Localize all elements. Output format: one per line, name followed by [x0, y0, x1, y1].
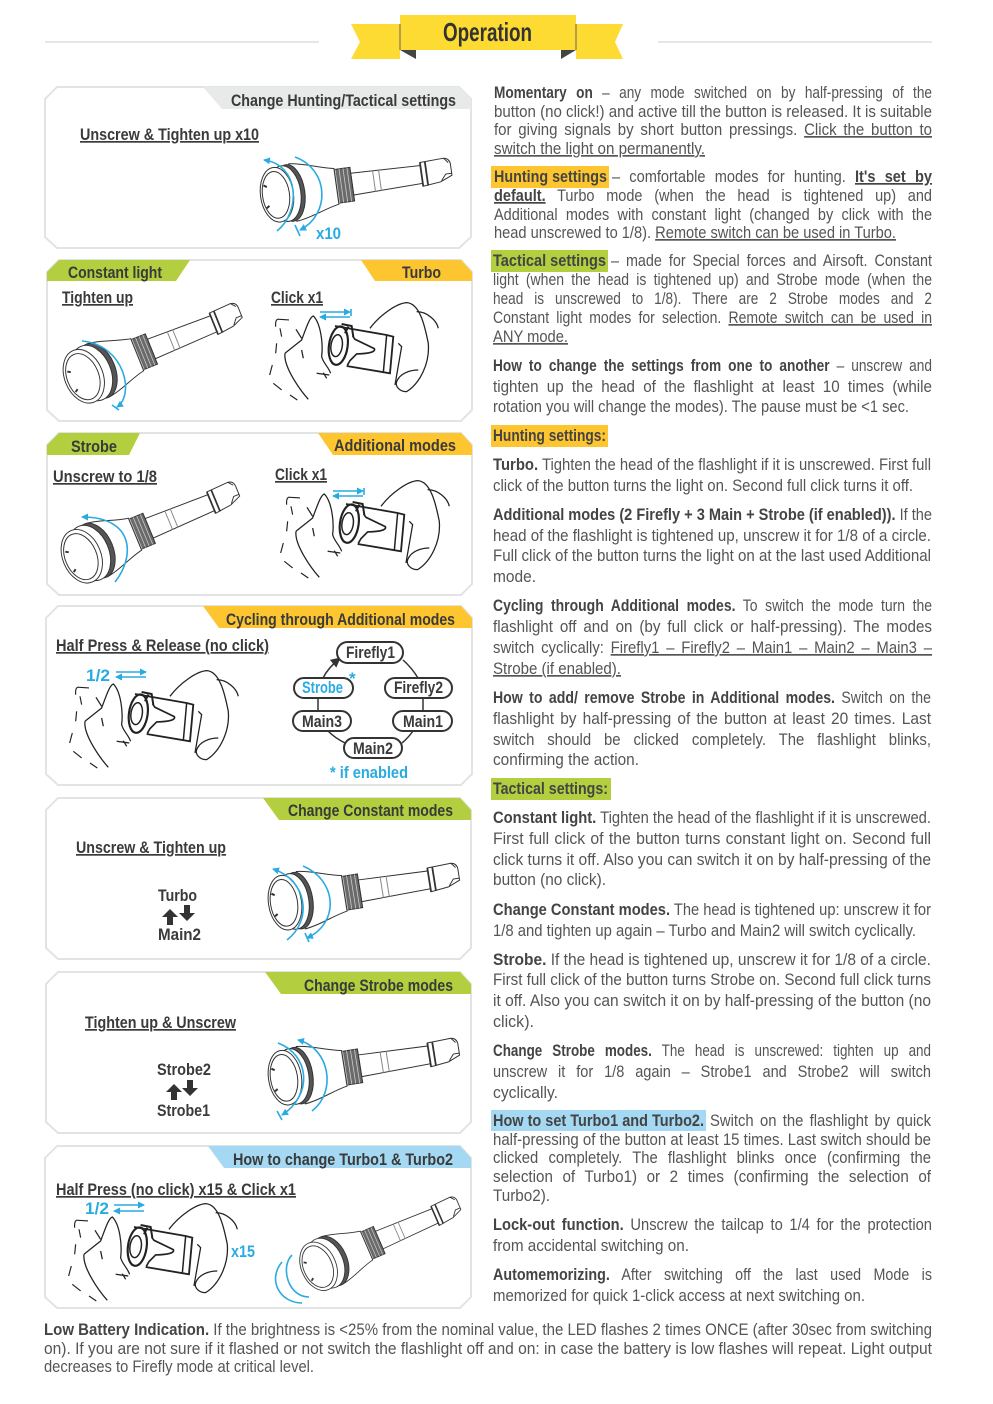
- panel: strobe / additional modes: Additional modes: [334, 436, 456, 455]
- panel: constant light / turbo: Constant light: [68, 263, 162, 282]
- text block: how to set turbo1 and turbo2: half-pressing of the button at least 15 times. Last switch should be: [493, 1130, 931, 1149]
- text block: hunting settings intro: – comfortable modes for hunting. It's set by: [612, 167, 932, 186]
- text block: how to change the settings: rotation you will change the modes). The pause must be <1 sec.: [493, 397, 909, 416]
- panel: how to change turbo1 and turbo2: x15: [231, 1242, 255, 1261]
- text block: hunting modes: mode.: [493, 567, 536, 586]
- panel: change strobe modes: [46, 972, 471, 1133]
- text block: how to set turbo1 and turbo2: [491, 1110, 931, 1205]
- text block: automemorizing: [493, 1265, 932, 1305]
- text block: momentary on: for giving signals by short button pressings. Click the button to: [494, 120, 932, 139]
- text block: tactical modes: Change Strobe modes. The head is unscrewed: tighten up and: [493, 1041, 931, 1060]
- heading: tactical settings: Tactical settings:: [493, 779, 608, 798]
- text block: automemorizing: memorized for quick 1-click access at next switching on.: [493, 1286, 865, 1305]
- panel: change strobe modes: Strobe2: [157, 1060, 211, 1079]
- text block: tactical settings intro: [491, 250, 932, 346]
- text block: tactical modes: First full click of the button turns Strobe on. Second full click turns: [493, 970, 931, 989]
- text block: how to change the settings: [493, 356, 932, 416]
- text block: hunting modes: Full click of the button turns the light on at the last used Additional: [493, 546, 931, 565]
- text block: lock-out function: from accidental switching on.: [493, 1236, 689, 1255]
- panel: change hunting/tactical settings: Unscrew & Tighten up x10: [80, 125, 259, 144]
- text block: momentary on: button (no click!) and active till the button is released. It is suitable: [494, 102, 932, 121]
- text block: hunting modes: confirming the action.: [493, 750, 639, 769]
- heading: hunting settings: Hunting settings:: [493, 426, 606, 445]
- text block: tactical modes: Change Constant modes. The head is tightened up: unscrew it for: [493, 900, 931, 919]
- panel: cycling through additional modes: Half Press & Release (no click): [56, 636, 269, 655]
- title rule right: [658, 41, 932, 43]
- title ribbon: Operation: [443, 17, 532, 47]
- panel: strobe / additional modes: Strobe: [71, 437, 117, 456]
- text block: how to set turbo1 and turbo2: Turbo2).: [493, 1186, 550, 1205]
- mode cycle diagram: Firefly1: [346, 643, 395, 662]
- mode cycle diagram: Strobe: [302, 678, 343, 697]
- text block: lock-out function: [493, 1215, 932, 1255]
- panel: constant light / turbo: Click x1: [271, 288, 323, 307]
- text block: tactical modes: 1/8 and tighten up again – Turbo and Main2 will switch cyclically.: [493, 921, 916, 940]
- text block: hunting modes: [493, 455, 932, 769]
- text block: tactical modes: it off. Also you can switch it on by half-pressing of the button (no: [493, 991, 931, 1010]
- text block: hunting settings intro: Hunting settings: [494, 167, 607, 186]
- panel: change hunting/tactical settings: x10: [316, 224, 341, 243]
- text block: hunting modes: Additional modes (2 Firefly + 3 Main + Strobe (if enabled)). If the: [493, 505, 932, 524]
- mode cycle diagram: Main1: [403, 712, 443, 731]
- text block: hunting settings intro: head unscrewed to 1/8). Remote switch can be used in Turbo.: [494, 223, 896, 242]
- text block: hunting settings intro: [491, 166, 932, 242]
- text block: how to set turbo1 and turbo2: Switch on the flashlight by quick: [710, 1111, 931, 1130]
- panel: change hunting/tactical settings: Change Hunting/Tactical settings: [231, 91, 456, 110]
- mode cycle diagram: Firefly2: [394, 678, 443, 697]
- panel: strobe / additional modes: [47, 433, 472, 595]
- panel: change constant modes: Turbo: [158, 886, 197, 905]
- text block: tactical modes: First full click of the button turns constant light on. Second full: [493, 829, 931, 848]
- panel: change constant modes: Change Constant modes: [288, 801, 453, 820]
- panel: how to change turbo1 and turbo2: [45, 1146, 471, 1308]
- text block: hunting modes: flashlight by half-pressing of the button at least 20 times. Last: [493, 709, 931, 728]
- text block: hunting modes: click of the button turns the light on. Second full click turns it off.: [493, 476, 913, 495]
- panel: how to change turbo1 and turbo2: 1/2: [85, 1199, 109, 1218]
- panel: cycling through additional modes: 1/2: [86, 666, 110, 685]
- text block: hunting modes: How to add/ remove Strobe in Additional modes. Switch on the: [493, 688, 931, 707]
- panel: constant light / turbo: Tighten up: [62, 288, 133, 307]
- text block: hunting modes: head of the flashlight is tightened up, unscrew it for 1/8 of a circle.: [493, 526, 931, 545]
- text block: momentary on: switch the light on permanently.: [494, 139, 705, 158]
- text block: automemorizing: Automemorizing. After switching off the last used Mode is: [493, 1265, 932, 1284]
- text block: tactical modes: [493, 808, 931, 1102]
- mode cycle diagram: Main3: [302, 712, 342, 731]
- text block: tactical modes: unscrew it for 1/8 again – Strobe1 and Strobe2 will switch: [493, 1062, 931, 1081]
- mode cycle diagram: * if enabled: [330, 763, 408, 782]
- text block: how to set turbo1 and turbo2: clicked completely. The flashlight blinks once (confirming the: [493, 1148, 931, 1167]
- panel: change strobe modes: Change Strobe modes: [304, 976, 453, 995]
- panel: change constant modes: Main2: [158, 925, 201, 944]
- text block: how to set turbo1 and turbo2: selection of Turbo1) or 2 times (confirming the selection of: [493, 1167, 931, 1186]
- text block: hunting settings intro: default. Turbo mode (when the head is tightened up) and: [494, 186, 932, 205]
- panel: cycling through additional modes: Cycling through Additional modes: [226, 610, 455, 629]
- mode cycle diagram: *: [349, 669, 356, 688]
- text block: low battery indication: decreases to Firefly mode at critical level.: [44, 1357, 314, 1376]
- panel: change strobe modes: Strobe1: [157, 1101, 210, 1120]
- panel: strobe / additional modes: Click x1: [275, 465, 327, 484]
- text block: low battery indication: on). If you are not sure if it flashed or not switch the flashlight off and on: in case the battery is low flashes will repeat. Light output: [44, 1339, 932, 1358]
- panel: cycling through additional modes: [46, 606, 472, 785]
- text block: momentary on: [494, 83, 932, 158]
- mode cycle diagram: Main2: [353, 739, 393, 758]
- text block: tactical settings intro: Tactical settings: [493, 251, 606, 270]
- text block: tactical settings intro: Constant light modes for selection. Remote switch can be used in: [493, 308, 932, 327]
- text block: how to set turbo1 and turbo2: How to set Turbo1 and Turbo2.: [493, 1111, 704, 1130]
- panel: change constant modes: Unscrew & Tighten up: [76, 838, 226, 857]
- panel: how to change turbo1 and turbo2: Half Press (no click) x15 & Click x1: [56, 1180, 296, 1199]
- text block: tactical settings intro: ANY mode.: [493, 327, 568, 346]
- text block: low battery indication: [44, 1320, 932, 1376]
- text block: tactical modes: click).: [493, 1012, 534, 1031]
- text block: hunting modes: switch cyclically: Firefly1 – Firefly2 – Main1 – Main2 – Main3 –: [493, 638, 932, 657]
- panel: how to change turbo1 and turbo2: How to change Turbo1 & Turbo2: [233, 1150, 453, 1169]
- text block: tactical modes: click turns it off. Also you can switch it on by half-pressing of the: [493, 850, 931, 869]
- text block: hunting modes: flashlight off and on (by full click or half-pressing). The modes: [493, 617, 932, 636]
- title rule left: [45, 41, 319, 43]
- text block: hunting modes: Strobe (if enabled).: [493, 659, 621, 678]
- text block: how to change the settings: How to change the settings from one to another – unscrew and: [493, 356, 932, 375]
- panel: change constant modes: [46, 798, 471, 959]
- panel: constant light / turbo: [47, 260, 472, 421]
- text block: how to change the settings: tighten up the head of the flashlight at least 10 times (while: [493, 377, 932, 396]
- title ribbon: [351, 15, 623, 59]
- text block: tactical modes: Constant light. Tighten the head of the flashlight if it is unscrewed.: [493, 808, 931, 827]
- mode cycle diagram: [293, 642, 452, 782]
- text block: hunting modes: switch should be clicked completely. The flashlight blinks,: [493, 730, 931, 749]
- text block: hunting modes: Turbo. Tighten the head of the flashlight if it is unscrewed. First full: [493, 455, 931, 474]
- text block: tactical modes: cyclically.: [493, 1083, 558, 1102]
- text block: lock-out function: Lock-out function. Unscrew the tailcap to 1/4 for the protection: [493, 1215, 932, 1234]
- panel: change strobe modes: Tighten up & Unscrew: [85, 1013, 237, 1032]
- panel: constant light / turbo: Turbo: [402, 263, 441, 282]
- panel: strobe / additional modes: Unscrew to 1/8: [53, 467, 157, 486]
- text block: tactical modes: button (no click).: [493, 870, 606, 889]
- text block: hunting modes: Cycling through Additional modes. To switch the mode turn the: [493, 596, 932, 615]
- text block: tactical modes: Strobe. If the head is tightened up, unscrew it for 1/8 of a circle.: [493, 950, 931, 969]
- text block: tactical settings intro: – made for Special forces and Airsoft. Constant: [611, 251, 932, 270]
- panel: change hunting/tactical settings: [45, 87, 471, 248]
